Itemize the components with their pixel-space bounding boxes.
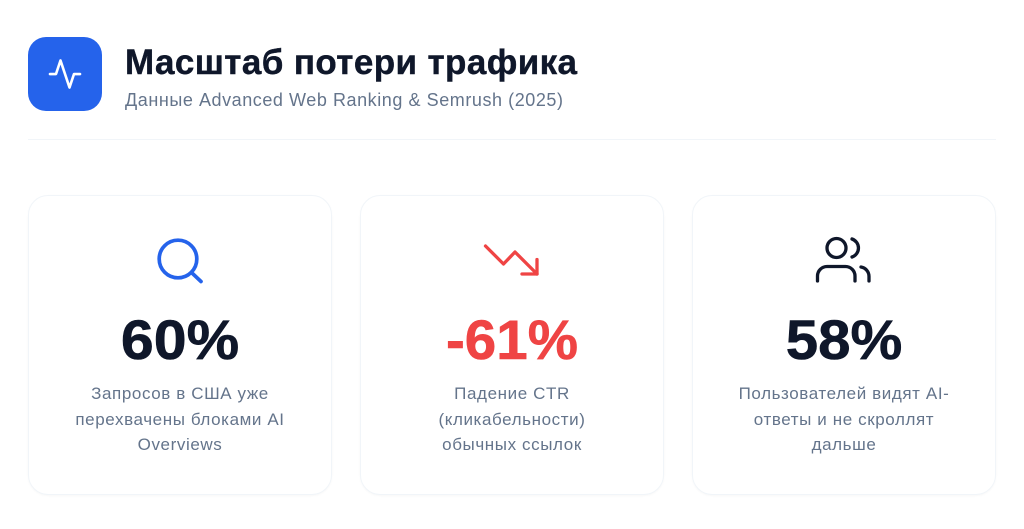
subtitle: Данные Advanced Web Ranking & Semrush (2025) [125, 90, 564, 110]
description: дальше [812, 435, 876, 454]
panel: users [692, 195, 996, 495]
stat: 60%: 60% [121, 308, 239, 371]
description [739, 384, 949, 454]
description: ответы и не скроллят [754, 410, 934, 429]
title: Масштаб потери трафика [125, 43, 577, 82]
description: (кликабельности) [438, 410, 586, 429]
panel: queries [28, 195, 332, 495]
description: Падение CTR [454, 384, 570, 403]
icon: magnifier [157, 238, 203, 284]
description: перехвачены блоками AI [75, 410, 285, 429]
icon: users [816, 236, 871, 283]
description: Запросов в США уже [91, 384, 269, 403]
description: Пользователей видят AI- [739, 384, 949, 403]
description: Overviews [138, 435, 222, 454]
description [438, 384, 586, 454]
panel: CTR drop [360, 195, 664, 495]
description: обычных ссылок [442, 435, 582, 454]
header icon: activity pulse [28, 37, 102, 111]
icon: trending down arrow [484, 244, 539, 276]
stat: 58%: 58% [786, 308, 902, 371]
description [75, 384, 285, 454]
header divider [28, 139, 996, 140]
stat: -61%: -61% [446, 308, 578, 371]
